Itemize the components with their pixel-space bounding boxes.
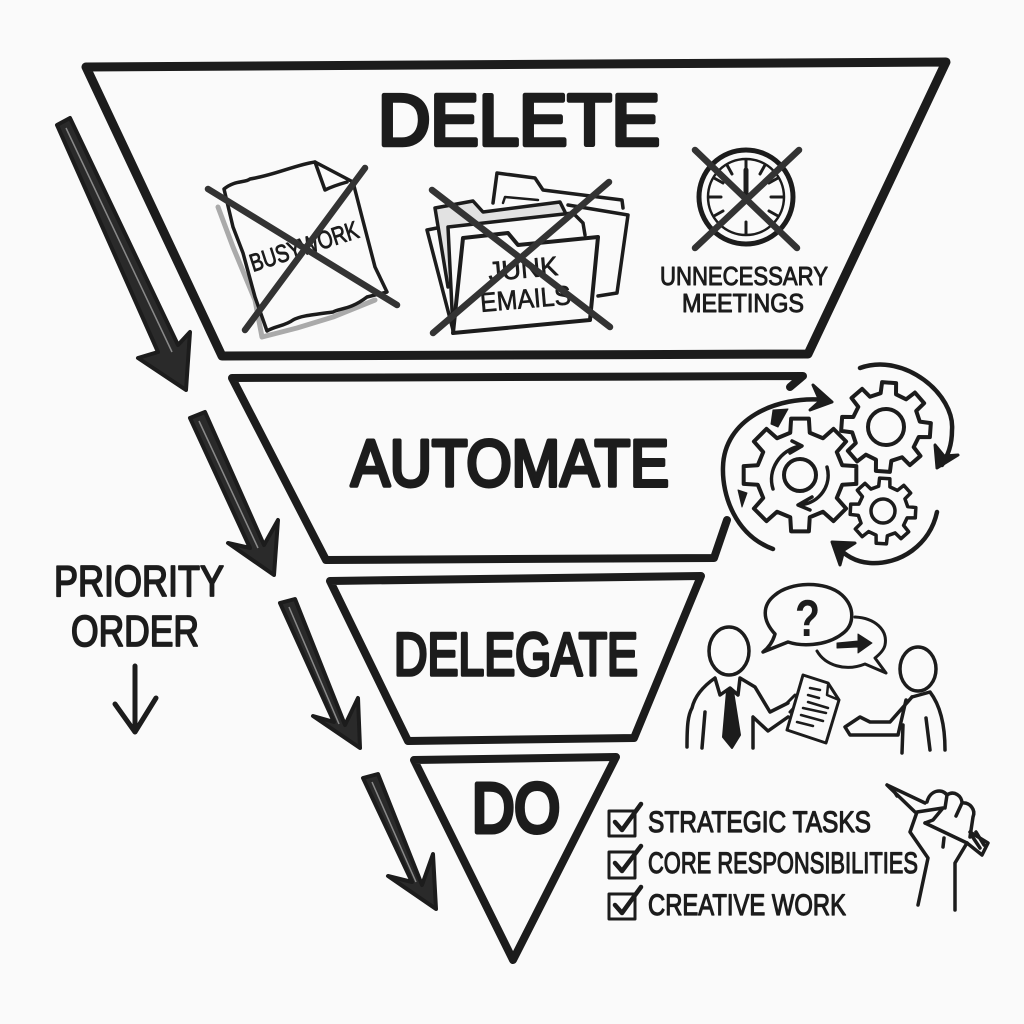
heading: delegate: DELEGATE bbox=[394, 621, 638, 688]
label: unnecessary meetings bbox=[660, 261, 828, 318]
arrow: priority arrow 1 bbox=[57, 118, 190, 390]
item: core responsibilities bbox=[609, 846, 918, 880]
label: unnecessary meetings: UNNECESSARY bbox=[660, 261, 828, 291]
upper gear bbox=[839, 380, 933, 474]
icon: hand holding pencil bbox=[887, 785, 988, 910]
panel: automate funnel tier bbox=[232, 376, 803, 560]
label: unnecessary meetings: MEETINGS bbox=[682, 288, 804, 318]
speech bubble with question: ? bbox=[795, 590, 820, 648]
heading: delete: DELETE bbox=[378, 81, 660, 161]
heading: automate: AUTOMATE bbox=[351, 426, 669, 500]
item: creative work: CREATIVE WORK bbox=[648, 889, 846, 922]
arrow: priority arrow 3 bbox=[280, 599, 360, 748]
checklist bbox=[609, 804, 918, 922]
item: strategic tasks bbox=[609, 804, 871, 839]
icon: gears with circular arrows bbox=[723, 365, 958, 565]
icon: crossed-out busywork paper: BUSYWORK bbox=[246, 216, 363, 278]
label: priority order bbox=[54, 557, 224, 732]
icon: crossed-out clock bbox=[695, 150, 799, 248]
arrow: priority arrow 4 bbox=[363, 774, 436, 909]
circular arrows bbox=[723, 365, 958, 565]
icon: crossed-out busywork paper bbox=[208, 162, 397, 337]
large gear bbox=[744, 419, 856, 531]
panel: delegate funnel tier bbox=[330, 576, 701, 741]
person giving document bbox=[687, 627, 839, 748]
arrow: priority order down bbox=[115, 666, 156, 732]
arrow: priority arrow 2 bbox=[190, 412, 278, 575]
item: core responsibilities: CORE RESPONSIBILITIES bbox=[648, 847, 918, 880]
label: priority order: PRIORITY bbox=[54, 557, 224, 606]
icon: crossed-out junk emails folders: EMAILS bbox=[479, 280, 572, 318]
icon: crossed-out junk emails folders bbox=[427, 173, 628, 333]
label: priority order: ORDER bbox=[71, 607, 199, 656]
panel: do funnel tier bbox=[414, 757, 616, 960]
item: creative work bbox=[609, 887, 846, 922]
speech bubble with arrow bbox=[817, 617, 886, 673]
person receiving document bbox=[845, 647, 945, 753]
lower gear bbox=[849, 477, 917, 545]
icon: two people delegating a document bbox=[687, 584, 945, 753]
item: strategic tasks: STRATEGIC TASKS bbox=[648, 806, 871, 839]
panel: delete funnel tier bbox=[86, 62, 946, 356]
speech bubble with question bbox=[763, 584, 852, 652]
icon: crossed-out junk emails folders: JUNK bbox=[487, 251, 559, 287]
heading: do: DO bbox=[472, 769, 560, 847]
